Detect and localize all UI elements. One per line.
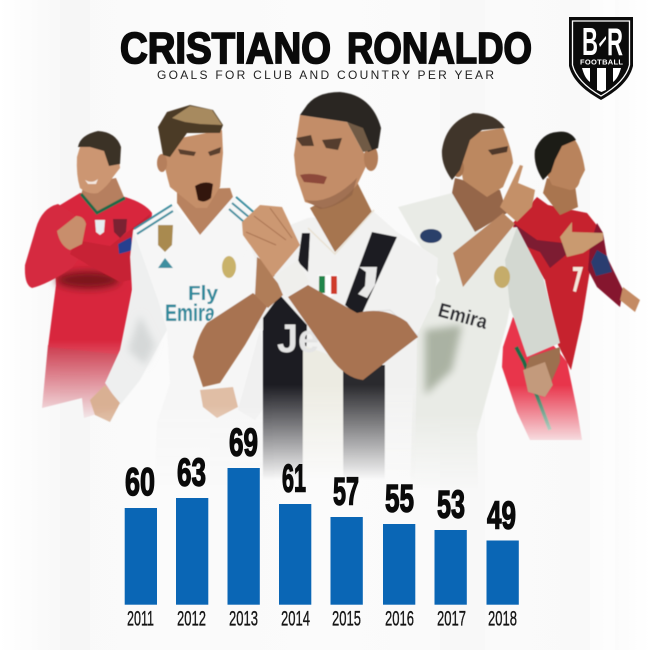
neck [81, 178, 124, 214]
neck [452, 178, 507, 232]
shorts [42, 345, 125, 418]
sleeve [505, 227, 560, 357]
fist [523, 362, 553, 397]
waist shadow [56, 271, 120, 289]
sleeve hem [363, 310, 418, 336]
bar 2016 [383, 478, 415, 630]
bar 2017: 2017 [437, 608, 466, 630]
bar 2016: 55 [385, 478, 414, 520]
eyes [296, 135, 342, 150]
Italian shield [318, 275, 338, 298]
left sleeve [105, 230, 167, 405]
neck [543, 178, 578, 215]
bar 2012: 2012 [177, 608, 206, 630]
bar 2014: 61 [282, 458, 306, 500]
bar 2012 [176, 452, 208, 630]
black stripe top left [298, 233, 310, 272]
hand and finger [500, 165, 535, 222]
bar 2018 [486, 494, 519, 630]
bar 2014 [279, 458, 311, 630]
logo slash [599, 36, 606, 47]
jersey [513, 197, 603, 370]
bar 2016: 2016 [385, 608, 414, 630]
title: CRISTIANO [120, 24, 331, 73]
number 7 [573, 267, 583, 292]
mouth [195, 182, 213, 202]
hand [620, 287, 640, 312]
armband [591, 250, 612, 276]
hair [78, 131, 121, 166]
right arm [70, 214, 150, 282]
eye [488, 146, 508, 155]
badges [95, 220, 105, 235]
bar 2015: 57 [333, 470, 359, 514]
right sleeve lower [238, 330, 270, 420]
bar 2013: 2013 [229, 608, 258, 630]
bar 2018: 2018 [488, 608, 517, 630]
forearm raised [453, 213, 515, 287]
stubble [305, 178, 357, 209]
collar line [308, 210, 374, 254]
player: Real Madrid white kit, centre left [90, 104, 262, 422]
hair [300, 92, 381, 152]
player: Real Madrid white kit, centre right [398, 113, 560, 490]
J logo [358, 267, 377, 298]
black stripe right [345, 232, 397, 318]
logo letter R: R [607, 21, 623, 64]
face [77, 144, 120, 193]
bar 2017: 53 [437, 484, 465, 526]
shorts [502, 317, 582, 440]
bar 2018: 49 [487, 494, 516, 538]
title [120, 24, 532, 73]
neck [177, 188, 233, 235]
ear [364, 145, 378, 171]
player: Juventus kit, centre [193, 92, 438, 490]
black stripe low left [263, 295, 307, 490]
crest [494, 266, 510, 288]
logo football word: FOOTBALL [580, 58, 623, 66]
hair [442, 113, 505, 180]
front hand [242, 205, 300, 277]
shirt shade [425, 325, 462, 395]
sponsor text line two: Emira [165, 300, 215, 327]
title: RONALDO [347, 24, 532, 73]
bar 2015 [330, 470, 363, 630]
right sleeve [588, 223, 623, 307]
gold badge [158, 225, 173, 252]
Jeep sponsor: Je [277, 317, 319, 361]
bar 2017 [434, 484, 467, 630]
logo letter B: B [582, 21, 598, 64]
ear [157, 154, 167, 172]
crest [222, 256, 236, 278]
bar 2013: 69 [229, 422, 258, 464]
player: Portugal red kit, far right [502, 132, 640, 440]
champions badge [420, 229, 442, 243]
left sleeve [513, 223, 567, 268]
bar chart: goals per year [125, 422, 519, 630]
black stripe low right [343, 365, 385, 490]
mouth [300, 174, 327, 184]
left arm [193, 293, 268, 387]
subtitle: GOALS FOR CLUB AND COUNTRY PER YEAR [157, 68, 494, 82]
face [458, 128, 513, 197]
bar 2011: 2011 [127, 608, 154, 630]
sleeve shade [128, 319, 155, 363]
hair [535, 132, 576, 180]
face [294, 115, 370, 208]
bar 2015: 2015 [332, 608, 361, 630]
white stripe low [303, 345, 343, 490]
fists [90, 385, 120, 422]
hair [158, 105, 223, 157]
bar 2011: 60 [125, 461, 155, 504]
collar stripes [134, 205, 173, 234]
shirt and shorts [132, 197, 252, 322]
face [163, 130, 223, 208]
shirt [398, 193, 560, 490]
back hand [255, 257, 283, 308]
bar 2013 [228, 422, 260, 630]
neck [310, 182, 372, 252]
left arm [24, 203, 70, 289]
hand on chest [560, 222, 603, 257]
white left sleeve [210, 245, 270, 325]
adidas mark [158, 258, 173, 268]
face [545, 140, 585, 190]
logo: B/R Football shield [569, 17, 633, 100]
eyes [178, 147, 221, 156]
collar [81, 194, 125, 213]
jersey [48, 193, 152, 355]
right forearm [288, 285, 418, 380]
bar 2014: 2014 [281, 608, 310, 630]
bar 2012: 63 [177, 452, 206, 494]
player: Portugal red kit, far left [25, 131, 152, 418]
sponsor text: Fly [188, 283, 219, 305]
wristband [273, 260, 309, 296]
shirt body [210, 210, 438, 490]
sponsor text: Emira [436, 300, 490, 334]
logo stripes [582, 68, 621, 92]
lower forearm [525, 347, 560, 385]
bar 2011 [125, 461, 157, 630]
hands [57, 216, 86, 250]
